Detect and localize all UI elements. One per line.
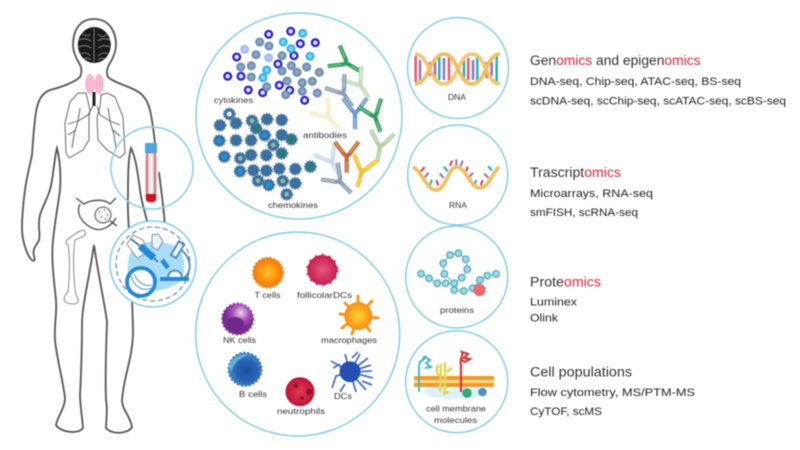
text block: transcriptomics: smFISH, scRNA-seq (530, 207, 638, 219)
icon: brain (78, 27, 111, 63)
antibodies cluster (309, 45, 394, 201)
panel: DNA (408, 18, 508, 118)
text block: cell populations: Cell populations (530, 365, 632, 380)
text block: proteomics (530, 275, 601, 325)
cell: follicular DCs: follicolarDCs (297, 290, 352, 300)
cell: NK cells (222, 304, 256, 345)
text block: proteomics: Olink (530, 313, 559, 325)
text block: cell populations: CyTOF, scMS (530, 406, 602, 418)
icon: blood tube (145, 143, 157, 202)
cell: B cells: B cells (239, 389, 267, 399)
icon: protein bead chain (418, 250, 499, 296)
panel: tissue sampling icon (110, 221, 196, 307)
cell: macrophages: macrophages (321, 335, 377, 345)
cell: neutrophils: neutrophils (277, 406, 325, 416)
text block: cell populations: Flow cytometry, MS/PTM-MS (530, 387, 695, 399)
text block: genomics: DNA-seq, Chip-seq, ATAC-seq, BS-seq (530, 76, 741, 88)
cell: T cells (253, 258, 283, 300)
label: proteins: proteins (440, 305, 474, 315)
icon: RNA strand (413, 159, 499, 190)
panel: immune cells (196, 232, 400, 436)
panel: proteins (406, 226, 508, 328)
icon: microscope (160, 241, 190, 279)
text block: genomics: Genomics and epigenomics (530, 53, 701, 68)
icon: DNA helix (415, 54, 500, 84)
cell: follicular DCs (297, 255, 352, 300)
text block: proteomics: Proteomics (530, 275, 601, 290)
icon: lungs and trachea (65, 92, 125, 158)
cell: DCs (331, 352, 373, 401)
text block: proteomics: Luminex (530, 297, 578, 309)
cell: DCs: DCs (334, 391, 352, 401)
panel: cell membrane molecules (406, 331, 508, 433)
text block: genomics: scDNA-seq, scChip-seq, scATAC-seq, scBS-seq (530, 96, 786, 108)
text block: transcriptomics (530, 165, 653, 219)
cytokines cluster (224, 28, 323, 104)
text block: cell populations (530, 365, 695, 418)
icon: bladder organ (76, 198, 117, 230)
cell: neutrophils (277, 377, 325, 416)
icon: thyroid (85, 74, 104, 94)
icon: membrane with proteins (414, 352, 494, 399)
panel: soluble molecules (196, 13, 402, 219)
label: chemokines: chemokines (268, 200, 318, 210)
label: cytokines: cytokines (214, 95, 253, 105)
label: cell membrane molecules: molecules (434, 415, 477, 425)
text block: transcriptomics: Trascriptomics (530, 165, 621, 180)
label: antibodies: antibodies (303, 130, 347, 140)
callout: blood sample circle (111, 127, 193, 209)
human body outline (22, 19, 165, 433)
cell: macrophages (321, 296, 378, 345)
text block: transcriptomics: Microarrays, RNA-seq (530, 188, 653, 200)
label: RNA: RNA (449, 200, 467, 210)
label: cell membrane molecules (426, 404, 486, 425)
icon: syringe (131, 239, 158, 262)
cell: NK cells: NK cells (223, 335, 256, 345)
cell: T cells: T cells (254, 290, 280, 300)
cell: B cells (228, 353, 267, 399)
icon: femur bone (64, 230, 86, 304)
text block: genomics (530, 53, 786, 108)
label: DNA: DNA (448, 92, 466, 102)
label: cell membrane molecules: cell membrane (426, 404, 486, 414)
icon: petri dish (127, 268, 155, 296)
panel: RNA (408, 125, 508, 225)
chemokines cluster (214, 108, 316, 200)
